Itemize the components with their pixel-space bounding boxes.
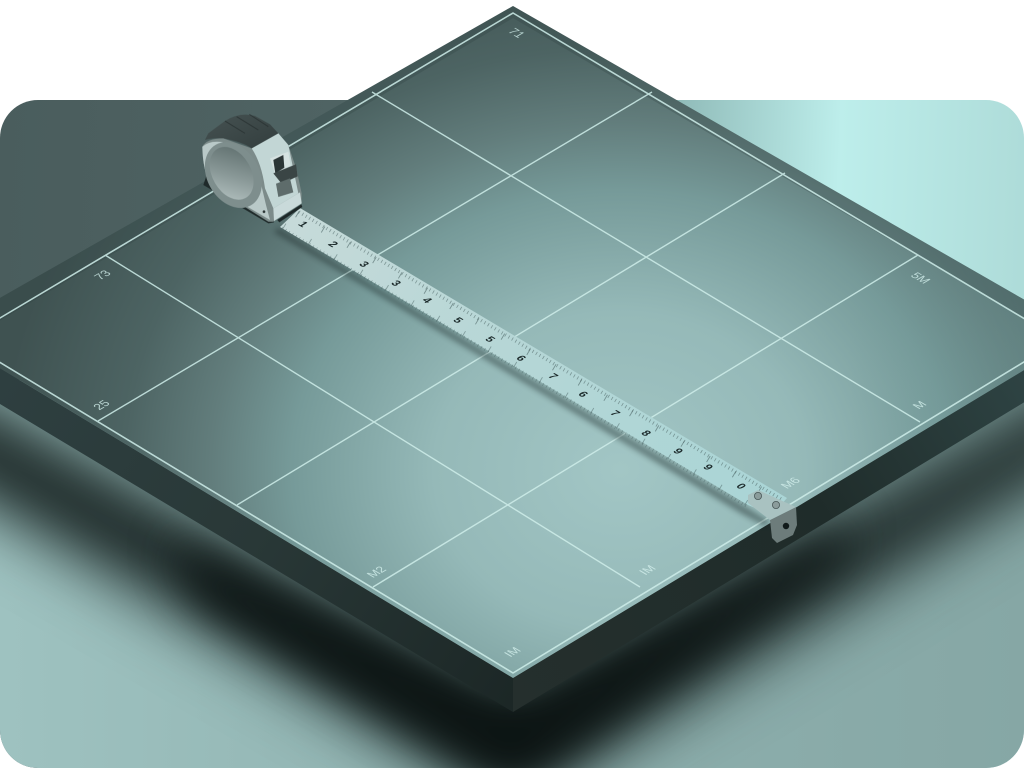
- blade numbers: 4: [419, 296, 435, 305]
- blade numbers: 9: [700, 463, 715, 472]
- blade numbers: 3: [388, 279, 403, 288]
- label 73: 73: [91, 268, 115, 282]
- blade numbers: 0: [733, 482, 748, 491]
- body housing: [202, 133, 302, 222]
- label 5M: 5M: [907, 270, 934, 286]
- lock vent: [276, 178, 293, 197]
- label 25: 25: [90, 398, 114, 412]
- label M right: M: [909, 399, 930, 411]
- blade shadow: [274, 228, 770, 526]
- lock window dark: [273, 155, 284, 173]
- label top corner: 71: [505, 26, 529, 40]
- front lip: [273, 192, 302, 221]
- blade numbers: 2: [325, 240, 340, 249]
- blade ticks: [282, 212, 781, 507]
- label IM lower right: IM: [636, 563, 659, 577]
- end hook: [748, 490, 797, 543]
- blade numbers: [295, 220, 748, 491]
- label M6: M6: [777, 475, 804, 491]
- lock slider: [273, 164, 298, 184]
- rubber top: [205, 115, 278, 148]
- rubber grip grooves: [225, 114, 268, 133]
- blade numbers: 8: [638, 429, 653, 438]
- side panel: [252, 133, 298, 208]
- label M2: M2: [363, 564, 390, 580]
- blade numbers: 7: [607, 409, 622, 418]
- body dark base: [203, 175, 274, 223]
- blade numbers: 5: [450, 316, 465, 325]
- blade strip: [280, 208, 787, 515]
- corner labels: [90, 26, 934, 659]
- rivet: [263, 210, 265, 213]
- lock window: [270, 152, 291, 174]
- board drop shadow core: [170, 520, 850, 768]
- label IM bottom: IM: [501, 645, 524, 659]
- face ring: [193, 132, 273, 218]
- blade exit slot: [277, 204, 302, 222]
- blade numbers: 6: [513, 354, 528, 363]
- blade numbers: 1: [295, 220, 310, 229]
- tape blade: [274, 208, 797, 543]
- board right side face: [513, 332, 1024, 712]
- face rim: [202, 142, 270, 220]
- blade numbers: 7: [545, 372, 560, 381]
- blade numbers: 3: [356, 260, 371, 269]
- blade numbers: 9: [670, 447, 685, 456]
- board drop shadow: [0, 370, 1024, 768]
- blade numbers: 6: [575, 390, 590, 399]
- face disc: [201, 139, 263, 208]
- board outer band shading: [0, 6, 1024, 334]
- board right tint: [513, 6, 1024, 678]
- tape measure body: [193, 114, 302, 223]
- board left side face: [0, 332, 513, 712]
- blade numbers: 5: [482, 335, 497, 344]
